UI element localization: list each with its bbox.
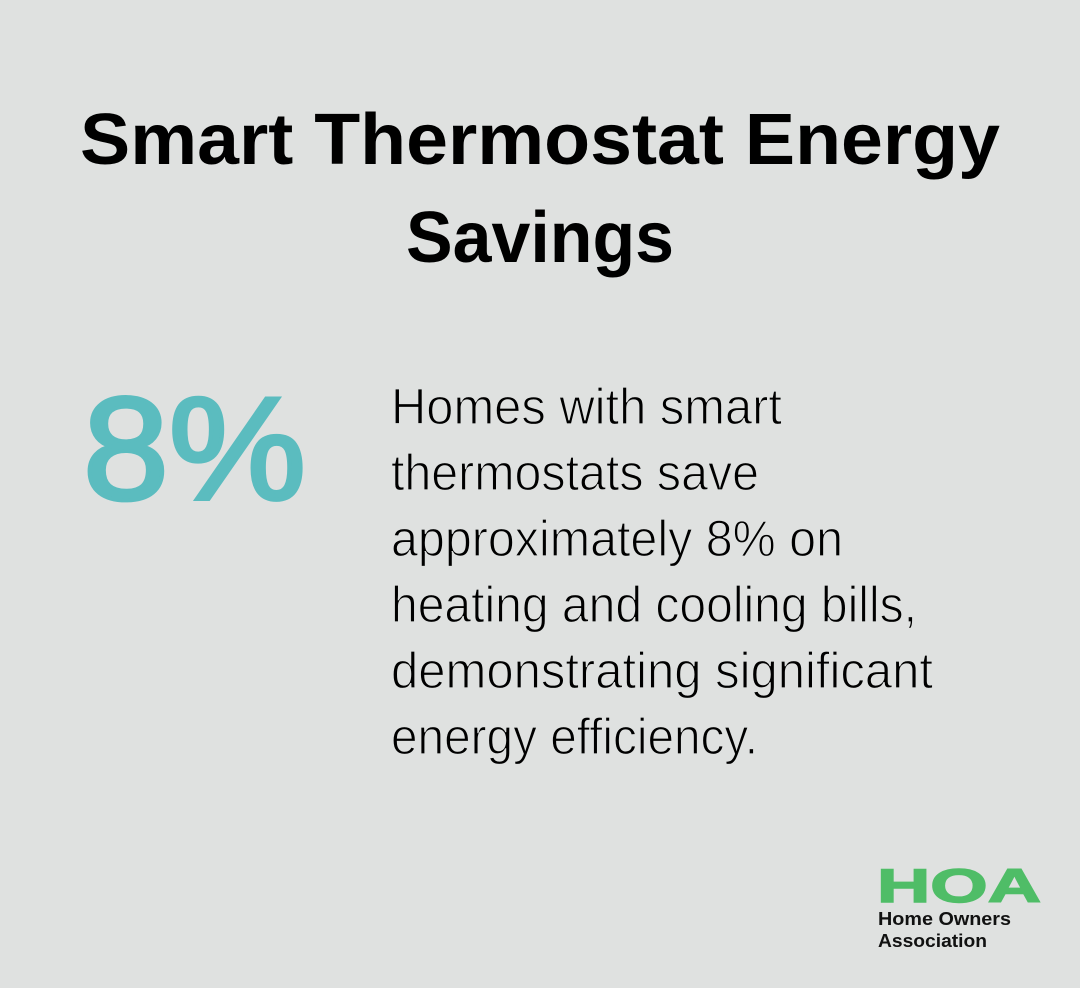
big statistic: 8%: 8% — [83, 367, 306, 530]
description text: thermostats save — [391, 444, 759, 501]
logo wordmark: HOA — [877, 859, 1041, 912]
description text — [391, 378, 933, 765]
description text: energy efficiency. — [391, 708, 758, 765]
description text: demonstrating significant — [391, 642, 933, 699]
description text: approximately 8% on — [391, 510, 843, 567]
logo subtitle: Home Owners — [878, 908, 1011, 929]
title — [80, 100, 1000, 278]
description text: Homes with smart — [391, 378, 782, 435]
logo subtitle: Association — [878, 930, 987, 951]
title: Savings — [406, 198, 674, 278]
logo subtitle — [878, 908, 1011, 951]
title: Smart Thermostat Energy — [80, 100, 1000, 180]
logo: HOA Home Owners Association — [877, 859, 1041, 951]
description text: heating and cooling bills, — [391, 576, 917, 633]
